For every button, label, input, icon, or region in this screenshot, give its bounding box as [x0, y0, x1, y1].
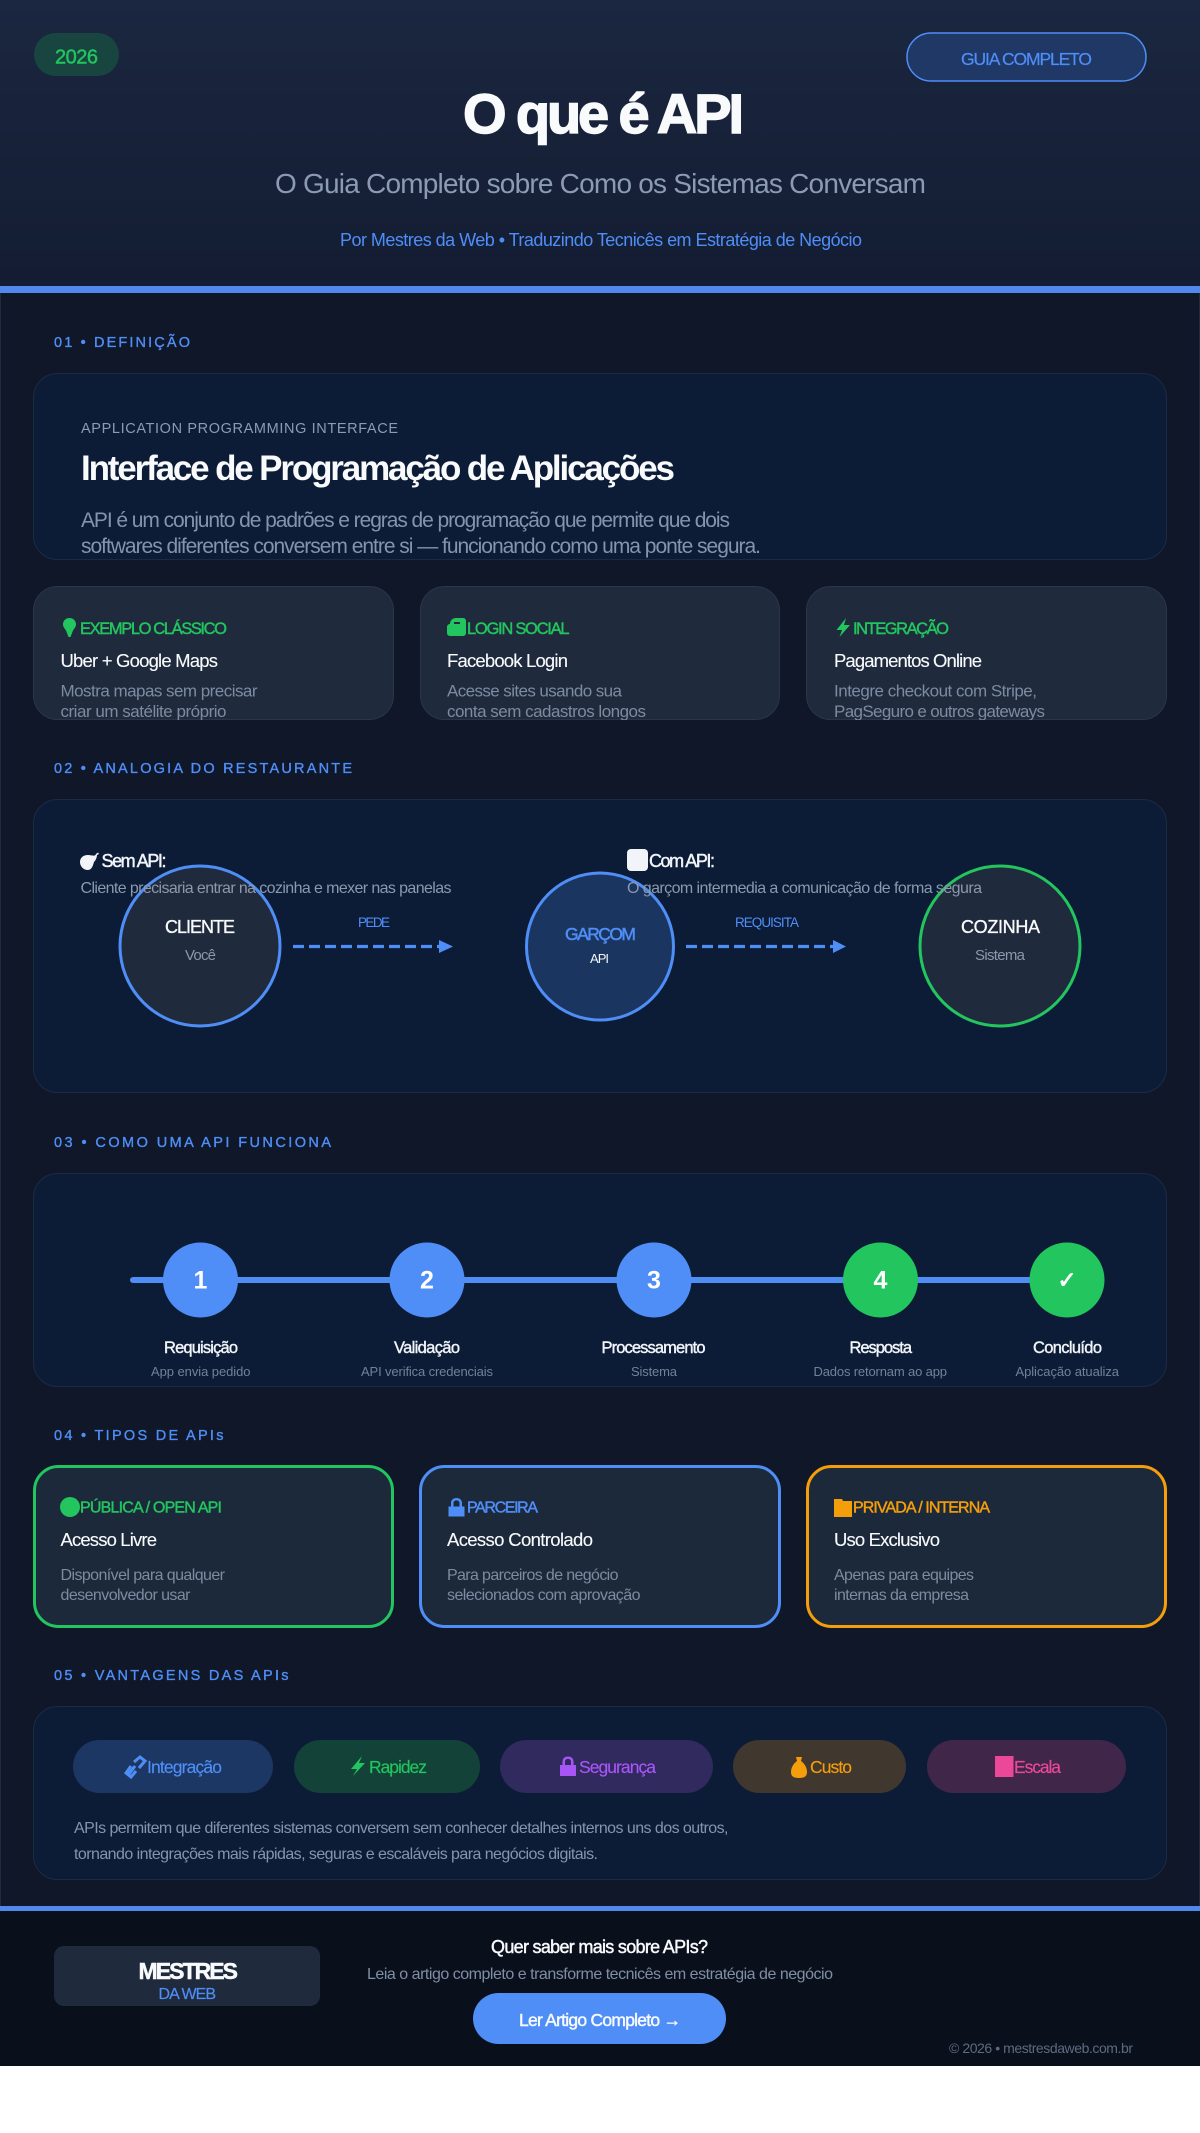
- card text: Mostra mapas sem precisar: [60, 682, 258, 700]
- step 4: Resposta: [850, 1339, 913, 1357]
- card label: EXEMPLO CLÁSSICO: [80, 619, 227, 638]
- guide badge: [907, 33, 1146, 81]
- card text: Integre checkout com Stripe,: [834, 682, 1037, 700]
- page background: [0, 286, 1200, 1911]
- year badge: [34, 33, 119, 76]
- card label: INTEGRAÇÃO: [853, 618, 949, 638]
- section label: vantagens: 05 • VANTAGENS DAS APIs: [54, 1668, 288, 1684]
- type text: [447, 1567, 641, 1604]
- footer accent bar: [0, 1906, 1200, 1911]
- panel: advantages: [34, 1706, 1166, 1880]
- icon: lightning: [836, 618, 850, 637]
- card title: Uber + Google Maps: [60, 650, 218, 671]
- circle: cozinha: [920, 866, 1080, 1026]
- circle: cozinha: Sistema: [975, 947, 1026, 964]
- circle: garçom: [526, 873, 674, 1020]
- logo: MESTRES: [138, 1958, 238, 1984]
- step 3: 3: [647, 1266, 661, 1294]
- card text: conta sem cadastros longos: [447, 702, 646, 721]
- pill: escala: [927, 1740, 1126, 1793]
- panel: how an API works: [34, 1174, 1166, 1386]
- section label: analogia: 02 • ANALOGIA DO RESTAURANTE: [54, 761, 352, 777]
- step 5: Aplicação atualiza: [1016, 1364, 1120, 1379]
- card text: criar um satélite próprio: [60, 702, 226, 721]
- card text: [61, 684, 258, 720]
- step 4: [814, 1242, 947, 1379]
- note: com API: O garçom intermedia a comunicação de forma segura: [627, 880, 982, 897]
- header accent bar: [0, 286, 1200, 293]
- type text: desenvolvedor usar: [60, 1587, 191, 1604]
- arrow: requisita: REQUISITA: [735, 915, 799, 930]
- header: [0, 0, 1200, 286]
- type text: Disponível para qualquer: [60, 1567, 226, 1584]
- step 1: Requisição: [164, 1339, 238, 1357]
- card text: PagSeguro e outros gateways: [834, 702, 1045, 721]
- year badge: 2026: [55, 46, 98, 68]
- step 4: Dados retornam ao app: [814, 1364, 947, 1379]
- step 2: [361, 1242, 494, 1379]
- timeline line: [130, 1277, 1040, 1283]
- step 4: 4: [874, 1266, 888, 1294]
- step 2: 2: [420, 1266, 434, 1294]
- icon: login: [447, 618, 466, 636]
- definition text: API é um conjunto de padrões e regras de programação que permite que dois: [81, 509, 730, 532]
- step 3: Processamento: [602, 1339, 706, 1357]
- panel: privada: [808, 1466, 1166, 1626]
- type title: Acesso Livre: [60, 1529, 157, 1550]
- button: [473, 1993, 726, 2044]
- section label: definição: 01 • DEFINIÇÃO: [54, 334, 190, 351]
- note: com API: Com API:: [649, 851, 715, 871]
- step 2: Validação: [394, 1339, 460, 1357]
- pill: custo: [733, 1740, 906, 1793]
- type text: Para parceiros de negócio: [447, 1567, 619, 1584]
- card text: [447, 684, 646, 720]
- note: sem API: Cliente precisaria entrar na cozinha e mexer nas panelas: [80, 880, 452, 897]
- note: sem API: Sem API:: [102, 851, 166, 871]
- card text: Acesse sites usando sua: [447, 682, 623, 700]
- icon: globe: [60, 1497, 80, 1517]
- panel: parceira: [420, 1466, 780, 1626]
- type title: Uso Exclusivo: [834, 1529, 940, 1550]
- type text: Apenas para equipes: [834, 1567, 974, 1584]
- type text: internas da empresa: [834, 1587, 969, 1604]
- step 3: [602, 1242, 706, 1379]
- pill: segurança: [500, 1740, 713, 1793]
- panel: definition: [34, 374, 1166, 560]
- pill: rapidez: Rapidez: [369, 1757, 427, 1777]
- arrow: pede: PEDE: [358, 915, 390, 930]
- panel: integração: [806, 586, 1166, 721]
- pill: escala: Escala: [1014, 1757, 1061, 1777]
- circle: garçom: API: [590, 951, 609, 966]
- button: Ler Artigo Completo →: [519, 2010, 681, 2030]
- advantages text: [74, 1820, 729, 1863]
- call to action heading: Quer saber mais sobre APIs?: [491, 1937, 708, 1957]
- section label: tipos: 04 • TIPOS DE APIs: [54, 1428, 224, 1444]
- circle: cozinha: COZINHA: [961, 917, 1040, 937]
- advantages text: tornando integrações mais rápidas, seguras e escaláveis para negócios digitais.: [74, 1846, 598, 1863]
- pill: rapidez: [294, 1740, 480, 1793]
- copyright: © 2026 • mestresdaweb.com.br: [949, 2040, 1133, 2056]
- pill: integração: [73, 1740, 273, 1793]
- card title: Pagamentos Online: [834, 650, 982, 671]
- circle: cliente: Você: [185, 947, 216, 964]
- step 5: [1016, 1242, 1120, 1379]
- type text: selecionados com aprovação: [447, 1587, 641, 1604]
- title: O que é API: [463, 82, 744, 145]
- step 1: 1: [194, 1266, 208, 1294]
- step 3: Sistema: [631, 1364, 678, 1379]
- definition text: [81, 509, 761, 558]
- note: com API: [627, 849, 982, 897]
- pill: integração: Integração: [147, 1757, 222, 1777]
- byline: Por Mestres da Web • Traduzindo Tecnicês em Estratégia de Negócio: [340, 230, 862, 250]
- type title: Acesso Controlado: [447, 1529, 593, 1550]
- logo: [54, 1946, 320, 2006]
- circle: garçom: GARÇOM: [565, 924, 636, 944]
- icon: lock: [448, 1498, 464, 1516]
- card text: [835, 684, 1044, 720]
- arrow: requisita: [686, 915, 846, 953]
- guide badge: GUIA COMPLETO: [961, 49, 1092, 69]
- card title: Facebook Login: [447, 650, 568, 671]
- icon: folder: [834, 1499, 852, 1517]
- type text: [834, 1567, 974, 1604]
- type label: PÚBLICA / OPEN API: [80, 1498, 222, 1516]
- type label: PARCEIRA: [467, 1500, 538, 1516]
- circle: cliente: [120, 866, 280, 1026]
- panel: login social: [420, 586, 780, 721]
- pill: segurança: Segurança: [579, 1757, 656, 1777]
- panel: exemplo clássico: [34, 586, 394, 721]
- section label: como funciona: 03 • COMO UMA API FUNCIONA: [54, 1135, 331, 1151]
- call to action text: Leia o artigo completo e transforme tecnicês em estratégia de negócio: [367, 1966, 833, 1983]
- subtitle: O Guia Completo sobre Como os Sistemas Conversam: [275, 168, 926, 199]
- definition eyebrow: APPLICATION PROGRAMMING INTERFACE: [81, 421, 398, 437]
- advantages text: APIs permitem que diferentes sistemas conversem sem conhecer detalhes internos uns dos outros,: [74, 1820, 729, 1837]
- note: sem API: [80, 851, 452, 897]
- definition text: softwares diferentes conversem entre si — funcionando como uma ponte segura.: [81, 535, 761, 558]
- panel: pública: [34, 1466, 392, 1626]
- step 5: ✓: [1057, 1268, 1077, 1294]
- definition heading: Interface de Programação de Aplicações: [81, 449, 675, 488]
- step 2: API verifica credenciais: [361, 1364, 494, 1379]
- step 1: App envia pedido: [151, 1364, 250, 1379]
- panel: restaurant analogy: [34, 800, 1166, 1092]
- circle: cliente: CLIENTE: [165, 917, 235, 937]
- pill: custo: Custo: [810, 1757, 852, 1777]
- step 1: [151, 1242, 250, 1379]
- type text: [60, 1567, 226, 1604]
- logo: DA WEB: [158, 1986, 216, 2003]
- footer: [0, 1911, 1200, 2066]
- type label: PRIVADA / INTERNA: [853, 1500, 990, 1516]
- icon: light bulb: [63, 618, 76, 637]
- arrow: pede: [293, 915, 453, 953]
- card label: LOGIN SOCIAL: [467, 620, 570, 638]
- step 5: Concluído: [1033, 1339, 1102, 1357]
